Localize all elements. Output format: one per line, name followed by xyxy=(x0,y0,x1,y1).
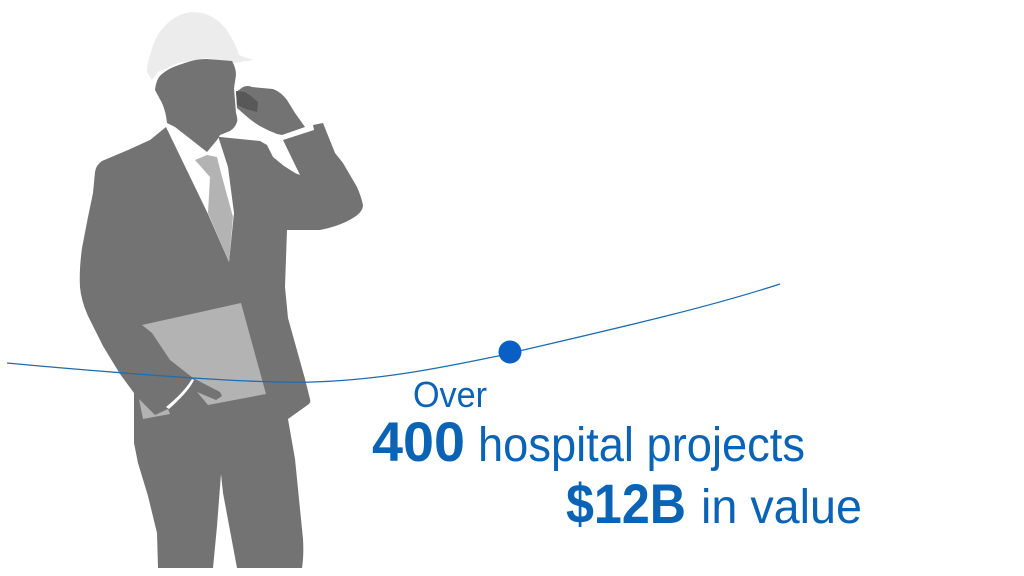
clipboard lower corner xyxy=(139,399,170,419)
necktie xyxy=(195,155,233,262)
trend line xyxy=(7,284,780,382)
icon: hard hat xyxy=(147,12,253,80)
pocket highlight xyxy=(166,379,194,409)
text: in value: in value xyxy=(701,481,862,534)
stat text: over 400 hospital projects, $12B in value xyxy=(372,374,862,535)
hand holding phone xyxy=(236,86,305,135)
stat: 400: 400 xyxy=(372,410,465,473)
shirt xyxy=(166,125,234,262)
text: hospital projects: hospital projects xyxy=(478,419,805,472)
icon: phone xyxy=(236,91,258,112)
figure: businessman silhouette xyxy=(80,12,363,568)
data point marker xyxy=(498,340,522,364)
text: over: Over xyxy=(413,374,487,415)
suit body xyxy=(80,123,363,568)
clipboard xyxy=(142,303,266,405)
stat: $12B: $12B xyxy=(566,472,686,535)
head xyxy=(155,59,237,152)
